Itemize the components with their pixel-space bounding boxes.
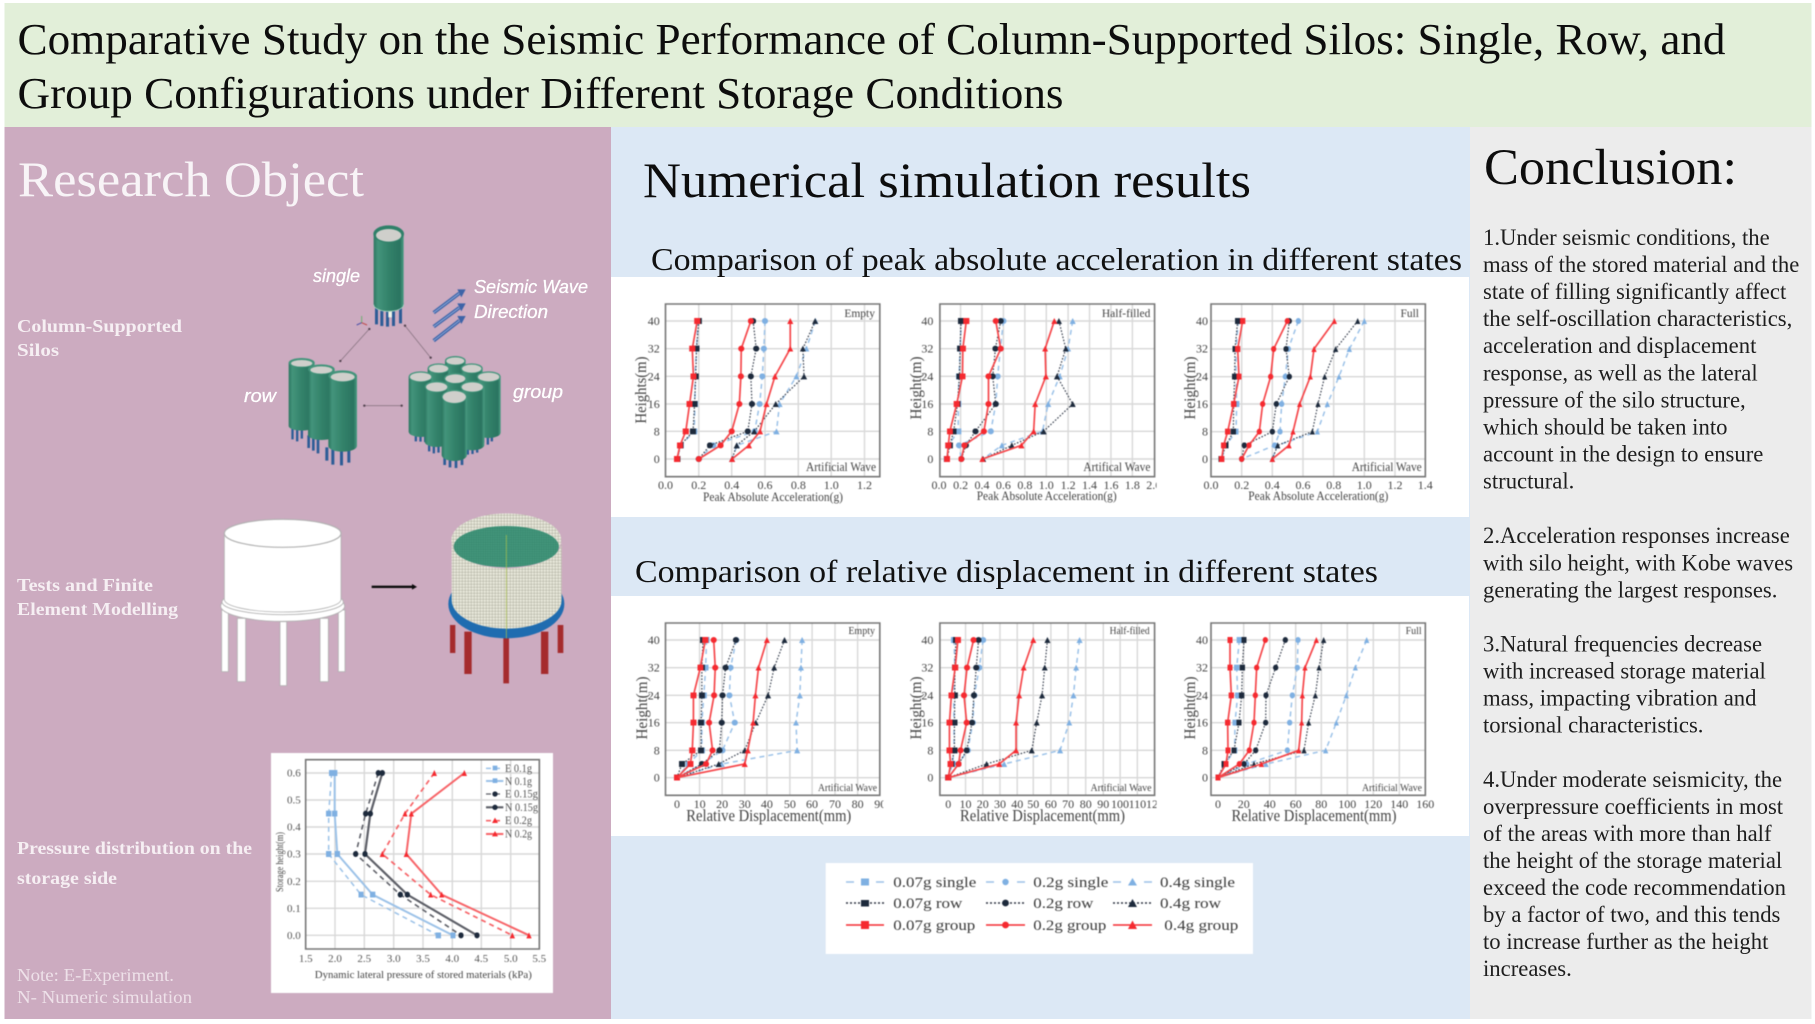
x axis ticks: 90 xyxy=(874,797,886,811)
x axis ticks: 0.6 xyxy=(1296,478,1310,492)
x axis ticks: 0 xyxy=(945,797,951,811)
legend: 0.2g group: 0.2g group xyxy=(1033,918,1106,934)
panel: conclusion xyxy=(1470,127,1812,1019)
y axis ticks: 8 xyxy=(654,743,660,757)
x axis ticks: 0.2 xyxy=(953,478,968,492)
panel: numerical simulation results xyxy=(611,127,1470,1019)
y axis ticks: 16 xyxy=(648,397,660,411)
conclusion point 4 xyxy=(1483,767,1786,981)
annotation: Artifical Wave: Artifical Wave xyxy=(1083,460,1151,474)
heading: peak absolute acceleration: Comparison of peak absolute acceleration in different states xyxy=(651,241,1462,277)
x axis ticks: 140 xyxy=(1390,797,1408,811)
x axis ticks: 40 xyxy=(1264,797,1276,811)
legend: wave intensity and configuration xyxy=(826,863,1253,954)
heading: conclusion: Conclusion: xyxy=(1484,139,1737,195)
pressure x tick labels: 2.0 xyxy=(328,953,342,965)
x axis ticks: 0.2 xyxy=(1234,478,1249,492)
y axis ticks: 24 xyxy=(648,369,660,383)
pressure x tick labels: 1.5 xyxy=(299,953,313,965)
pressure x tick labels: 5.0 xyxy=(504,953,518,965)
x axis ticks: 0 xyxy=(674,797,680,811)
y axis ticks: 32 xyxy=(1196,661,1208,675)
x axis ticks: 0.4 xyxy=(974,478,990,492)
legend: 0.4g group xyxy=(1113,918,1238,934)
x axis ticks: 50 xyxy=(784,797,796,811)
y axis ticks: 40 xyxy=(648,633,660,647)
legend: 0.2g group xyxy=(986,918,1106,934)
x axis title: Peak Absolute Acceleration(g) xyxy=(703,490,843,504)
panel: research object xyxy=(4,127,611,1019)
y axis ticks: 16 xyxy=(1196,397,1208,411)
y axis ticks: 8 xyxy=(654,424,660,438)
label: pressure distribution: storage side xyxy=(17,868,117,888)
legend: 0.4g group: 0.4g group xyxy=(1164,918,1238,934)
y axis ticks: 24 xyxy=(921,369,933,383)
note: experiment and numeric simulation: Note: E-Experiment. xyxy=(17,965,174,985)
x axis ticks xyxy=(931,480,1158,490)
x axis ticks: 10 xyxy=(694,797,706,811)
x axis ticks: 100 xyxy=(1111,797,1129,811)
x axis ticks: 10 xyxy=(960,797,972,811)
x axis title: Peak Absolute Acceleration(g) xyxy=(977,489,1117,503)
conclusion point 3: torsional characteristics. xyxy=(1483,712,1703,738)
label: group: group xyxy=(513,381,563,402)
x axis ticks: 0.0 xyxy=(1204,478,1218,492)
pressure legend labels: N 0.15g xyxy=(505,800,538,814)
label: pressure distribution xyxy=(17,838,252,888)
x axis ticks: 110 xyxy=(1129,797,1146,811)
y axis ticks xyxy=(921,633,933,785)
conclusion point 3: with increased storage material xyxy=(1483,658,1766,684)
annotation: Artificial Wave: Artificial Wave xyxy=(1362,783,1423,794)
x axis ticks xyxy=(674,800,884,809)
y axis title: Height(m) xyxy=(1182,356,1199,420)
y axis ticks: 0 xyxy=(654,452,660,466)
y axis ticks: 0 xyxy=(1202,771,1208,785)
y axis ticks: 24 xyxy=(648,688,660,702)
conclusion point 1: acceleration and displacement xyxy=(1483,333,1757,358)
y axis ticks: 32 xyxy=(648,661,660,675)
label: pressure distribution: Pressure distribution on the xyxy=(17,838,252,858)
x axis ticks: 50 xyxy=(1027,797,1039,811)
chart: acceleration, full xyxy=(1182,304,1433,503)
label: single: single xyxy=(313,265,360,286)
icon: experimental tank xyxy=(221,519,345,686)
pressure legend labels: E 0.15g xyxy=(505,786,538,800)
x axis ticks: 60 xyxy=(1045,797,1057,811)
panel tag: Half-filled: Half-filled xyxy=(1110,626,1150,637)
conclusion point 4: by a factor of two, and this tends xyxy=(1483,902,1781,927)
label: row: row xyxy=(244,385,278,406)
x axis ticks: 70 xyxy=(1062,797,1074,811)
conclusion point 4: to increase further as the height xyxy=(1483,929,1769,954)
heading: research object: Research Object xyxy=(18,151,364,207)
x axis ticks: 70 xyxy=(829,797,841,811)
icon: single silo xyxy=(373,225,404,327)
legend: 0.2g single xyxy=(986,875,1109,891)
x axis ticks: 1.0 xyxy=(1039,478,1054,492)
x axis ticks: 0.4 xyxy=(724,478,739,492)
card: acceleration charts xyxy=(611,277,1469,517)
y axis ticks xyxy=(1196,314,1208,466)
pressure legend labels: E 0.1g xyxy=(505,761,532,775)
series: N 0.1g xyxy=(335,773,453,935)
x axis ticks: 0.4 xyxy=(1265,478,1280,492)
y axis ticks: 16 xyxy=(1196,716,1208,730)
pressure x tick labels: 4.5 xyxy=(474,953,489,965)
x axis ticks: 1.2 xyxy=(1388,478,1402,492)
conclusion point 4: of the areas with more than half xyxy=(1483,821,1772,846)
y axis ticks: 40 xyxy=(921,314,933,328)
x axis ticks: 40 xyxy=(1011,797,1023,811)
y axis ticks xyxy=(1196,633,1208,785)
y axis ticks: 16 xyxy=(921,397,933,411)
y axis ticks: 40 xyxy=(648,314,660,328)
annotation: Artificial Wave: Artificial Wave xyxy=(806,460,876,474)
conclusion point 1: the self-oscillation characteristics, xyxy=(1483,306,1792,331)
y axis title: Height(m) xyxy=(908,356,925,420)
legend: 0.4g row xyxy=(1113,896,1221,912)
x axis ticks: 160 xyxy=(1416,797,1434,811)
panel tag: Half-filled: Half-filled xyxy=(1102,308,1151,320)
x axis title: Relative Displacement(mm) xyxy=(1232,806,1396,825)
y axis ticks: 0 xyxy=(654,771,660,785)
x axis ticks: 30 xyxy=(994,797,1006,811)
conclusion point 2: 2.Acceleration responses increase xyxy=(1483,523,1790,548)
panel tag: Full: Full xyxy=(1400,308,1419,320)
series: E 0.15g xyxy=(356,773,461,935)
conclusion point 4: increases. xyxy=(1483,956,1572,981)
series: N 0.15g xyxy=(365,773,477,935)
y axis title: Height(m) xyxy=(634,676,651,740)
legend lines xyxy=(486,766,503,836)
chart: pressure distribution on storage side xyxy=(271,753,553,993)
conclusion point 3 xyxy=(1483,632,1766,738)
x axis ticks: 80 xyxy=(1315,797,1327,811)
tests and finite element diagram xyxy=(221,513,564,686)
y axis title: Height(m) xyxy=(908,676,925,740)
icon: group of silos xyxy=(409,356,501,468)
arrow: model to mesh xyxy=(372,584,417,590)
x axis ticks xyxy=(1204,478,1433,492)
label: seismic wave direction: Seismic Wave xyxy=(474,276,588,297)
x axis ticks xyxy=(945,800,1158,809)
panel tag: Empty: Empty xyxy=(844,308,875,320)
legend: 0.4g single: 0.4g single xyxy=(1160,875,1235,891)
panel tag: Empty: Empty xyxy=(848,626,875,637)
x axis ticks: 1.2 xyxy=(1061,478,1076,492)
pressure y tick labels: 0.3 xyxy=(287,848,301,860)
x axis ticks: 0.0 xyxy=(658,478,673,492)
x axis title: Peak Absolute Acceleration(g) xyxy=(1248,489,1388,503)
label: tests and finite element modelling xyxy=(17,575,179,619)
conclusion point 1: 1.Under seismic conditions, the xyxy=(1483,225,1770,250)
title text line 1: Comparative Study on the Seismic Performance of Column-Supported Silos: Single, Row, and xyxy=(18,15,1726,64)
y axis ticks xyxy=(648,633,660,785)
x axis title: Relative Displacement(mm) xyxy=(960,806,1125,825)
legend: 0.07g group: 0.07g group xyxy=(893,918,975,934)
conclusion point 1: which should be taken into xyxy=(1483,414,1727,440)
pressure y tick labels: 0.0 xyxy=(287,930,301,942)
annotation: Artificial Wave: Artificial Wave xyxy=(818,783,878,794)
y axis ticks: 8 xyxy=(1202,743,1208,757)
y axis ticks: 32 xyxy=(921,342,933,356)
x axis ticks: 0.8 xyxy=(1326,478,1341,492)
x axis ticks: 0.0 xyxy=(932,478,946,492)
y axis ticks: 40 xyxy=(921,633,933,647)
x axis ticks: 40 xyxy=(761,797,773,811)
silo configurations diagram xyxy=(289,225,501,468)
x axis ticks: 60 xyxy=(806,797,818,811)
series: E 0.2g xyxy=(382,773,512,935)
series: E 0.1g xyxy=(329,773,438,935)
legend: 0.4g row: 0.4g row xyxy=(1160,896,1221,912)
conclusion point 1 xyxy=(1483,225,1799,494)
y axis ticks: 8 xyxy=(927,743,933,757)
pressure y tick labels: 0.1 xyxy=(287,903,301,915)
conclusion point 2: generating the largest responses. xyxy=(1483,578,1777,602)
x axis ticks: 1.2 xyxy=(857,478,872,492)
pressure y tick labels: 0.6 xyxy=(287,768,301,780)
x axis ticks: 20 xyxy=(716,797,728,811)
x axis ticks: 80 xyxy=(1080,797,1092,811)
pressure y tick labels: 0.2 xyxy=(287,876,301,888)
y axis ticks xyxy=(648,314,660,466)
pressure y tick labels: 0.4 xyxy=(287,822,301,834)
x axis ticks: 60 xyxy=(1290,797,1302,811)
y axis title: Heights(m) xyxy=(633,356,650,424)
y axis ticks: 16 xyxy=(648,716,660,730)
conclusion point 4: overpressure coefficients in most xyxy=(1483,794,1784,819)
x axis ticks: 0.2 xyxy=(691,478,706,492)
legend: 0.07g single xyxy=(846,875,977,891)
label: tests and finite element modelling: Element Modelling xyxy=(17,599,179,619)
icon: finite element tank xyxy=(448,513,564,683)
x axis ticks: 0.6 xyxy=(996,478,1011,492)
pressure y tick labels xyxy=(287,768,301,942)
y axis ticks: 24 xyxy=(921,688,933,702)
x axis ticks xyxy=(1215,797,1434,811)
x axis ticks xyxy=(658,478,872,492)
arrow: single to group xyxy=(404,324,432,359)
legend: 0.2g row: 0.2g row xyxy=(1033,896,1093,912)
pressure legend labels xyxy=(505,761,538,840)
y axis ticks: 16 xyxy=(921,716,933,730)
x axis ticks: 20 xyxy=(1238,797,1250,811)
label: column-supported silos: Silos xyxy=(17,340,59,360)
x axis ticks: 0.8 xyxy=(791,478,806,492)
label: seismic wave direction xyxy=(474,276,588,322)
legend: 0.07g row xyxy=(846,896,962,912)
pressure x tick labels: 3.5 xyxy=(416,953,430,965)
arrows: seismic wave direction xyxy=(434,289,466,341)
icon: axis triad xyxy=(357,316,367,325)
pressure x tick labels: 4.0 xyxy=(445,953,460,965)
conclusion point 1: structural. xyxy=(1483,468,1574,494)
annotation: Artificial Wave: Artificial Wave xyxy=(1090,783,1152,794)
arrow: single to row xyxy=(339,328,370,362)
heading: numerical simulation results: Numerical simulation results xyxy=(643,152,1251,208)
card: displacement charts xyxy=(611,596,1469,836)
arrow: row to group xyxy=(363,404,403,407)
x axis ticks: 1.0 xyxy=(824,478,839,492)
x axis ticks: 2.0 xyxy=(1146,478,1161,492)
panel tag: Full: Full xyxy=(1406,626,1422,637)
y axis ticks: 0 xyxy=(1202,452,1208,466)
pressure y tick labels: 0.5 xyxy=(287,794,301,806)
pressure x tick labels: 5.5 xyxy=(532,953,547,965)
chart: displacement, full xyxy=(1182,623,1434,825)
label: column-supported silos xyxy=(17,316,183,360)
legend: 0.07g row: 0.07g row xyxy=(893,896,962,912)
chart: acceleration, empty xyxy=(633,304,880,504)
pressure x tick labels xyxy=(299,953,547,965)
conclusion point 4: 4.Under moderate seismicity, the xyxy=(1483,767,1782,792)
y axis ticks: 32 xyxy=(648,342,660,356)
legend: 0.07g single: 0.07g single xyxy=(893,875,977,891)
x axis ticks: 1.4 xyxy=(1082,478,1097,492)
pressure x tick labels: 2.5 xyxy=(357,953,372,965)
pressure x axis title: Dynamic lateral pressure of stored materials (kPa) xyxy=(315,969,532,981)
y axis ticks: 40 xyxy=(1196,314,1208,328)
icon: row of silos xyxy=(289,358,357,465)
x axis ticks: 0.8 xyxy=(1017,478,1032,492)
pressure legend labels: N 0.2g xyxy=(505,826,532,840)
legend: 0.2g single: 0.2g single xyxy=(1033,875,1109,891)
heading: relative displacement: Comparison of relative displacement in different states xyxy=(635,553,1378,589)
x axis ticks: 100 xyxy=(1338,797,1356,811)
y axis ticks: 24 xyxy=(1196,688,1208,702)
x axis ticks: 120 xyxy=(1364,797,1382,811)
y axis ticks: 40 xyxy=(1196,633,1208,647)
y axis ticks: 0 xyxy=(927,452,933,466)
conclusion point 1: state of filling significantly affect xyxy=(1483,279,1787,304)
title banner xyxy=(4,3,1812,127)
conclusion point 3: mass, impacting vibration and xyxy=(1483,686,1757,710)
y axis ticks: 32 xyxy=(1196,342,1208,356)
chart: acceleration, half-filled xyxy=(908,304,1161,503)
note: experiment and numeric simulation: N- Numeric simulation xyxy=(17,987,192,1007)
annotation: Artificial Wave: Artificial Wave xyxy=(1352,460,1422,474)
x axis ticks: 80 xyxy=(852,797,864,811)
x axis ticks: 1.8 xyxy=(1125,478,1140,492)
x axis title: Relative Displacement(mm) xyxy=(686,806,851,825)
label: seismic wave direction: Direction xyxy=(474,301,548,322)
x axis ticks: 1.4 xyxy=(1418,478,1433,492)
conclusion point 4: the height of the storage material xyxy=(1483,848,1782,873)
conclusion point 1: pressure of the silo structure, xyxy=(1483,388,1746,412)
x axis ticks: 0.6 xyxy=(758,478,772,492)
y axis ticks: 0 xyxy=(927,771,933,785)
title text line 2: Group Configurations under Different Storage Conditions xyxy=(18,69,1064,118)
conclusion point 2: with silo height, with Kobe waves xyxy=(1483,550,1793,576)
chart: displacement, half-filled xyxy=(908,623,1164,825)
pressure x tick labels: 3.0 xyxy=(387,953,401,965)
y axis ticks: 8 xyxy=(927,424,933,438)
y axis title: Height(m) xyxy=(1182,676,1199,740)
y axis ticks: 24 xyxy=(1196,369,1208,383)
x axis ticks: 1.6 xyxy=(1104,478,1118,492)
conclusion point 1: mass of the stored material and the xyxy=(1483,252,1799,277)
conclusion point 1: response, as well as the lateral xyxy=(1483,360,1758,386)
legend: 0.4g single xyxy=(1113,875,1235,891)
conclusion point 3: 3.Natural frequencies decrease xyxy=(1483,632,1762,656)
x axis ticks: 30 xyxy=(739,797,751,811)
label: column-supported silos: Column-Supported xyxy=(17,316,183,336)
pressure y axis title: Storage height(m) xyxy=(274,832,286,892)
series: N 0.2g xyxy=(406,773,529,935)
x axis ticks: 90 xyxy=(1097,797,1109,811)
pressure legend labels: E 0.2g xyxy=(505,813,532,827)
note: experiment and numeric simulation xyxy=(17,965,192,1007)
y axis ticks: 8 xyxy=(1202,424,1208,438)
conclusion point 4: exceed the code recommendation xyxy=(1483,875,1786,900)
legend: 0.2g row xyxy=(986,896,1093,912)
x axis ticks: 1.0 xyxy=(1357,478,1372,492)
chart: displacement, empty xyxy=(634,623,886,825)
y axis ticks xyxy=(921,314,933,466)
x axis ticks: 20 xyxy=(977,797,989,811)
conclusion point 2 xyxy=(1483,523,1793,602)
x axis ticks: 0 xyxy=(1215,797,1221,811)
x axis ticks: 120 xyxy=(1146,797,1164,811)
y axis ticks: 32 xyxy=(921,661,933,675)
legend: 0.07g group xyxy=(846,918,975,934)
conclusion point 1: account in the design to ensure xyxy=(1483,442,1763,466)
pressure legend labels: N 0.1g xyxy=(505,774,532,788)
label: tests and finite element modelling: Tests and Finite xyxy=(17,575,153,595)
